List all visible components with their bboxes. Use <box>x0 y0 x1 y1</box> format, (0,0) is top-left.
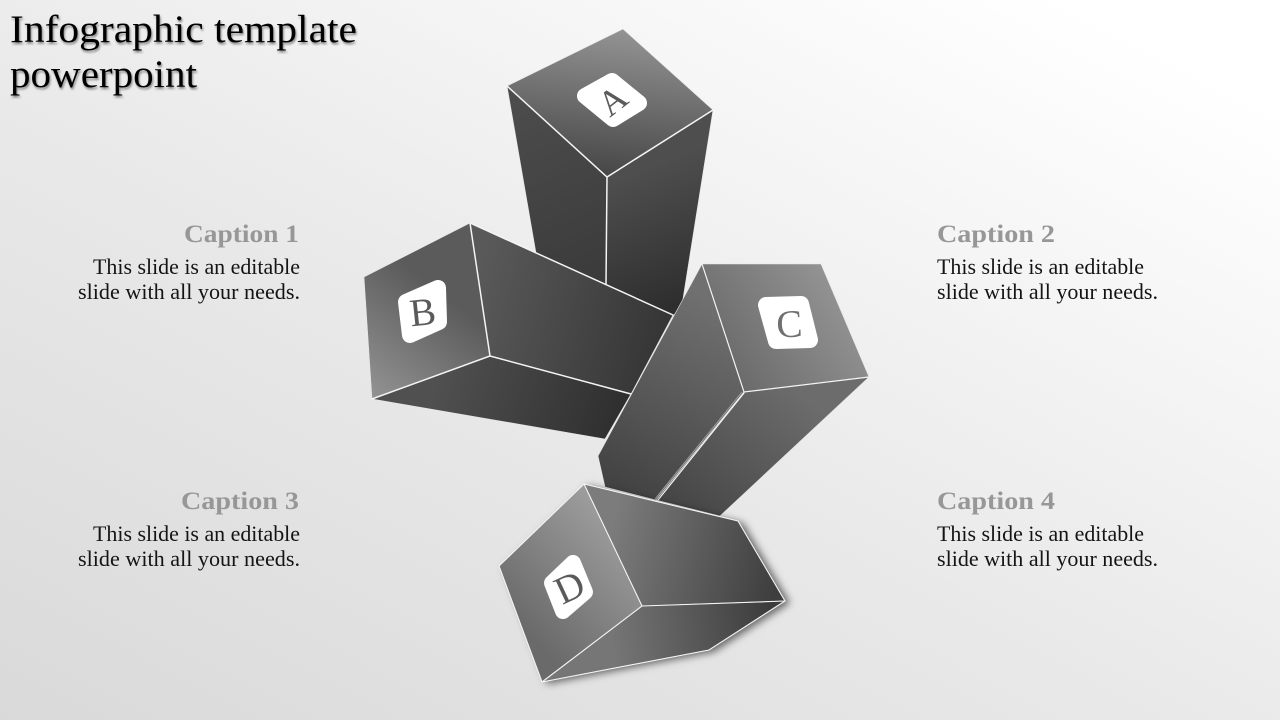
caption 2 text block: Caption 2 <box>937 221 1055 248</box>
caption 3 text block: slide with all your needs. <box>78 546 300 571</box>
icon: tile D: D <box>548 562 592 613</box>
caption 3 text block: This slide is an editable <box>93 521 300 546</box>
caption 2 text block <box>937 221 1158 304</box>
caption 2 text block: slide with all your needs. <box>937 279 1158 304</box>
icon: tile A: A <box>590 77 635 124</box>
caption 1 text block: slide with all your needs. <box>78 279 300 304</box>
block B <box>364 223 673 439</box>
block A <box>507 29 713 320</box>
block D <box>499 484 785 682</box>
block C <box>598 264 869 516</box>
caption 3 text block <box>78 488 300 571</box>
caption 4 text block: slide with all your needs. <box>937 546 1158 571</box>
caption 3 text block: Caption 3 <box>181 488 299 515</box>
caption 1 text block: This slide is an editable <box>93 254 300 279</box>
caption 4 text block: This slide is an editable <box>937 521 1144 546</box>
title: Infographic template <box>10 8 357 51</box>
caption 4 text block <box>937 488 1158 571</box>
icon: tile B: B <box>408 290 438 335</box>
icon: tile C: C <box>775 302 803 347</box>
caption 1 text block <box>78 221 300 304</box>
caption 2 text block: This slide is an editable <box>937 254 1144 279</box>
title <box>10 8 357 96</box>
icon: tile C <box>766 302 810 347</box>
caption 1 text block: Caption 1 <box>184 221 299 248</box>
title: powerpoint <box>10 53 197 96</box>
caption 4 text block: Caption 4 <box>937 488 1056 515</box>
